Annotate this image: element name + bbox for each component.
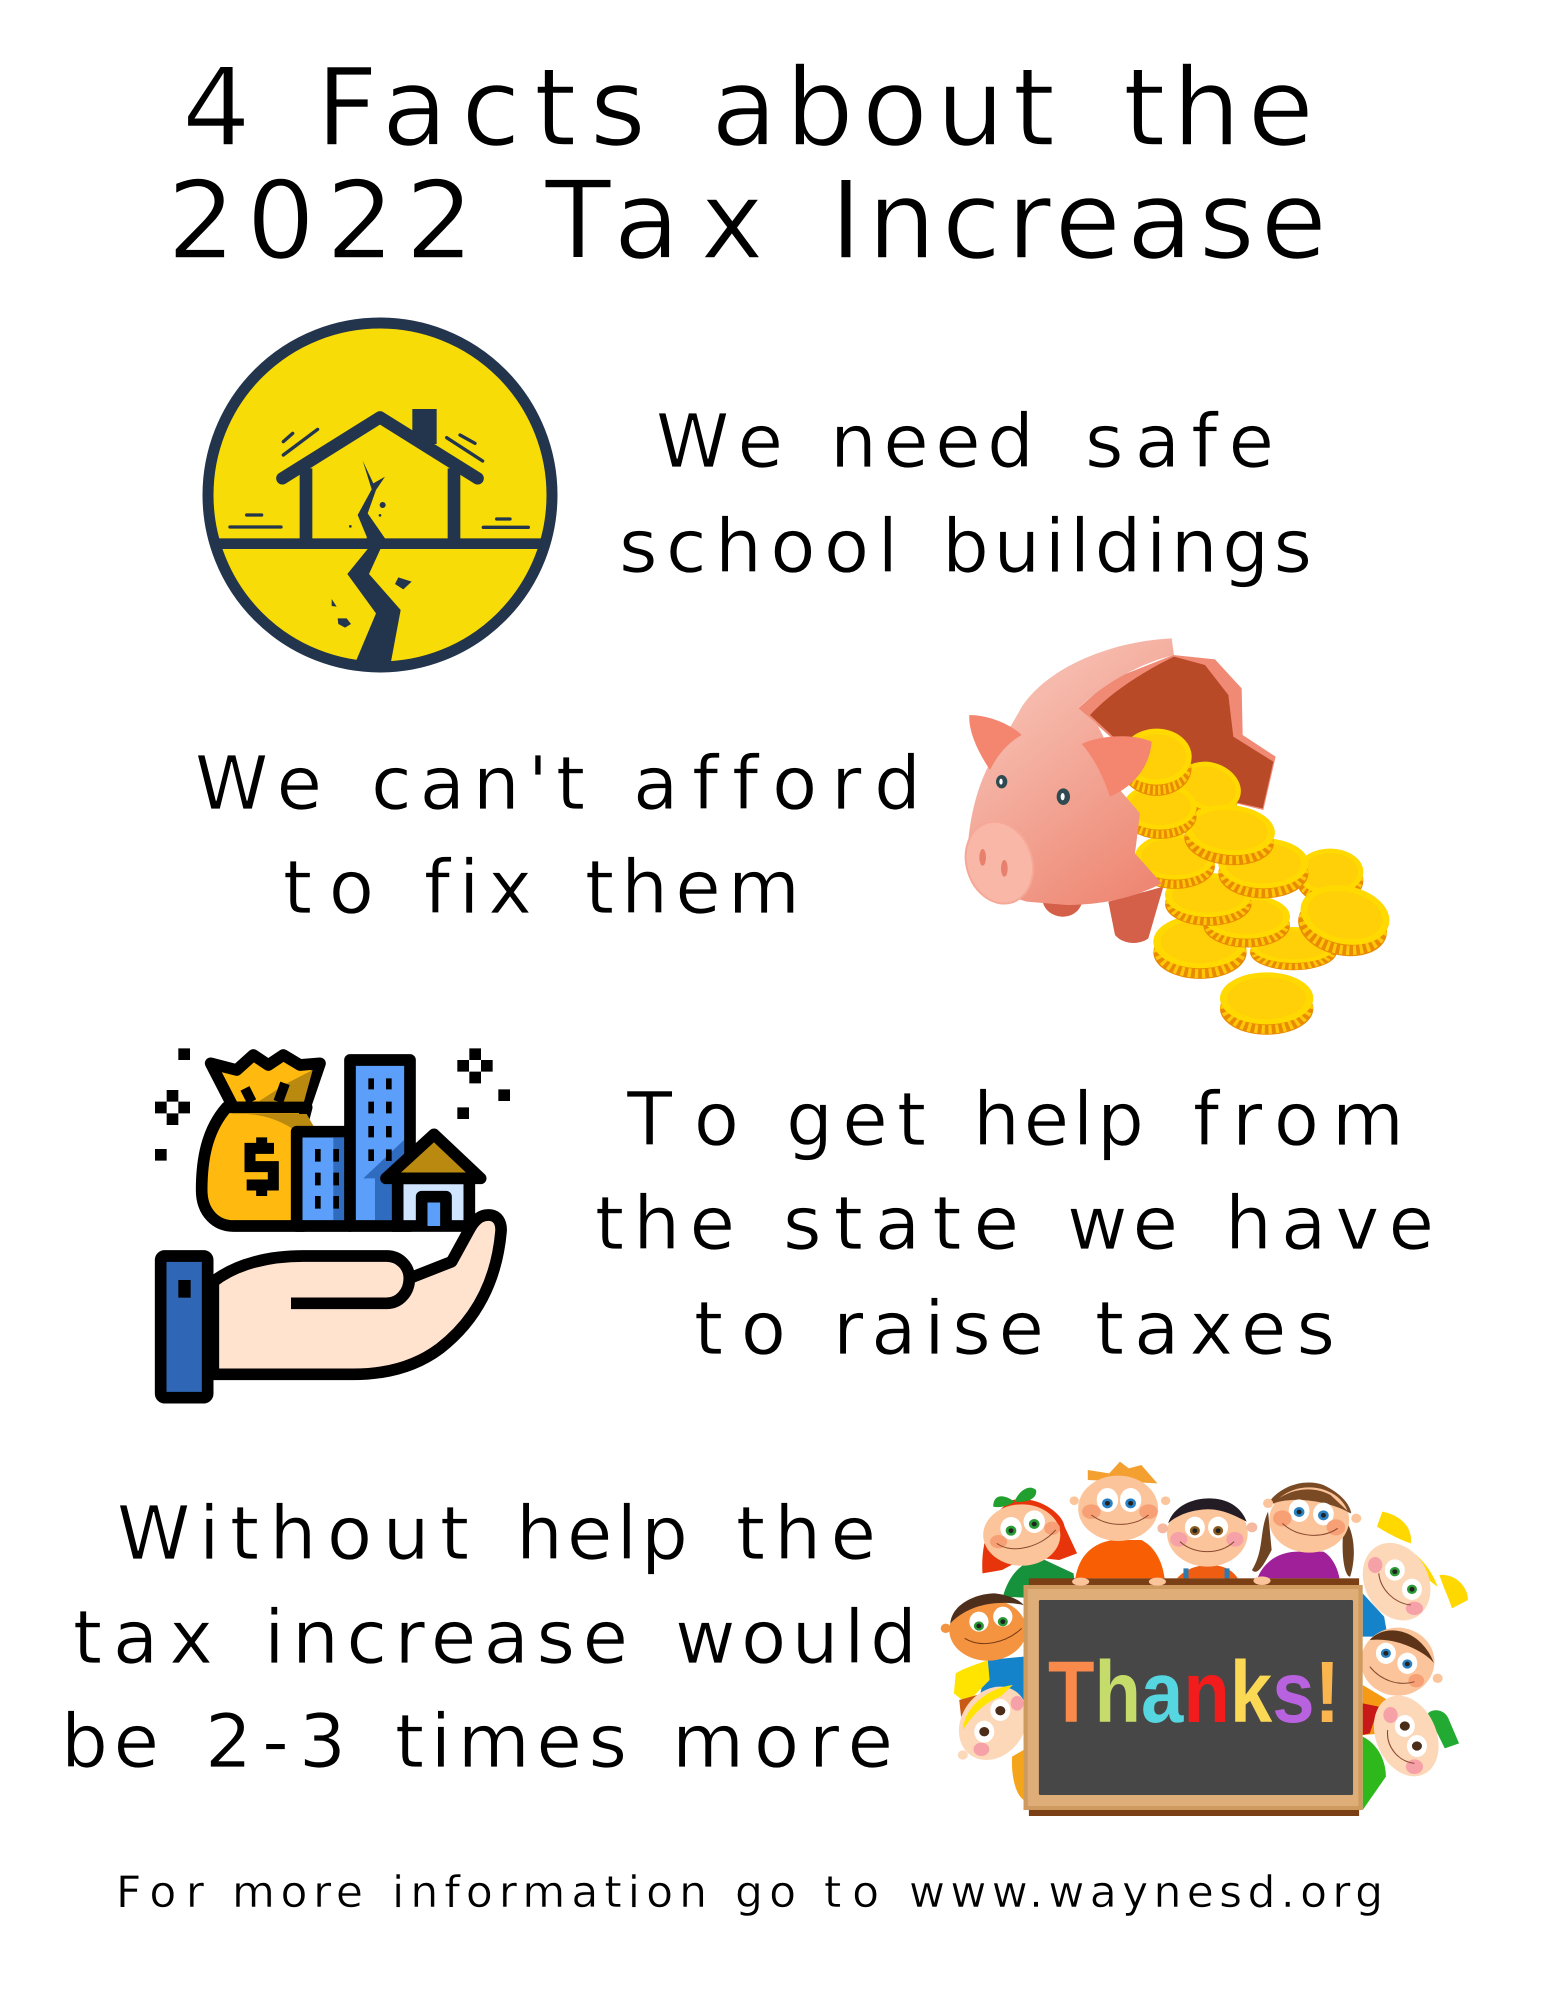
text: we can't afford to fix them: fix (424, 845, 532, 931)
text: without help the tax increase would be 2-3 times more: times (395, 1699, 627, 1785)
icon: cracked house in yellow circle (208, 323, 552, 667)
text: to get help from the state we have to raise taxes: we (1067, 1181, 1178, 1267)
text: without help the tax increase would be 2-3 times more: would (675, 1595, 917, 1681)
text: we can't afford to fix them: to (283, 845, 374, 931)
text: without help the tax increase would be 2-3 times more: more (672, 1699, 893, 1785)
text: we need safe school buildings: safe (1085, 399, 1274, 485)
text: we can't afford to fix them: afford (633, 741, 921, 827)
text: we need safe school buildings: buildings (942, 504, 1312, 590)
footer: for more information: more (232, 1867, 363, 1918)
title: the (1123, 46, 1314, 171)
text: to get help from the state we have to raise taxes (595, 1077, 1434, 1372)
title (167, 46, 1327, 284)
text: to get help from the state we have to raise taxes: raise (833, 1286, 1044, 1372)
text: to get help from the state we have to raise taxes: taxes (1095, 1286, 1335, 1372)
text: to get help from the state we have to raise taxes: state (783, 1181, 1019, 1267)
text: we need safe school buildings: need (830, 399, 1034, 485)
text: without help the tax increase would be 2-3 times more: the (736, 1491, 876, 1577)
illustration: children around thanks chalkboard (941, 1462, 1468, 1816)
text: we need safe school buildings: We (656, 399, 783, 485)
text: we can't afford to fix them: them (585, 845, 800, 931)
text: without help the tax increase would be 2-3 times more (61, 1491, 917, 1785)
text: we need safe school buildings: school (619, 504, 898, 590)
footer: for more information: go (735, 1867, 796, 1918)
text: to get help from the state we have to raise taxes: To (626, 1077, 739, 1163)
text: to get help from the state we have to raise taxes: the (595, 1181, 735, 1267)
text: without help the tax increase would be 2-3 times more: increase (264, 1595, 628, 1681)
text: without help the tax increase would be 2-3 times more: help (516, 1491, 688, 1577)
text: without help the tax increase would be 2-3 times more: Without (117, 1491, 469, 1577)
chalkboard (1024, 1576, 1363, 1816)
text: we need safe school buildings (619, 399, 1312, 590)
thanks lettering: Thanks! (1048, 1644, 1340, 1741)
text: without help the tax increase would be 2-3 times more: 2-3 (205, 1699, 346, 1785)
title: Tax (544, 159, 764, 284)
title: about (711, 46, 1055, 171)
icon: hand holding money bag and buildings (155, 1048, 510, 1398)
text: without help the tax increase would be 2-3 times more: be (61, 1699, 159, 1785)
text: to get help from the state we have to raise taxes: from (1193, 1077, 1404, 1163)
text: to get help from the state we have to raise taxes: have (1225, 1181, 1434, 1267)
text: we can't afford to fix them: We (195, 741, 322, 827)
footer: for more information: www.waynesd.org (909, 1867, 1383, 1918)
children group (941, 1462, 1468, 1816)
text: we can't afford to fix them (195, 741, 921, 931)
text: to get help from the state we have to raise taxes: help (973, 1077, 1144, 1163)
title: Increase (830, 159, 1327, 284)
footer: for more information: to (824, 1867, 879, 1918)
title: 2022 (167, 159, 474, 284)
title: 4 (182, 46, 251, 171)
icon: broken piggy bank with coins (955, 638, 1395, 1035)
title: Facts (316, 46, 646, 171)
text: without help the tax increase would be 2-3 times more: tax (73, 1595, 213, 1681)
footer: for more information: information (392, 1867, 707, 1918)
text: we can't afford to fix them: can't (371, 741, 585, 827)
text: to get help from the state we have to raise taxes: get (786, 1077, 926, 1163)
text: to get help from the state we have to raise taxes: to (694, 1286, 786, 1372)
footer: for more information: For (116, 1867, 205, 1918)
